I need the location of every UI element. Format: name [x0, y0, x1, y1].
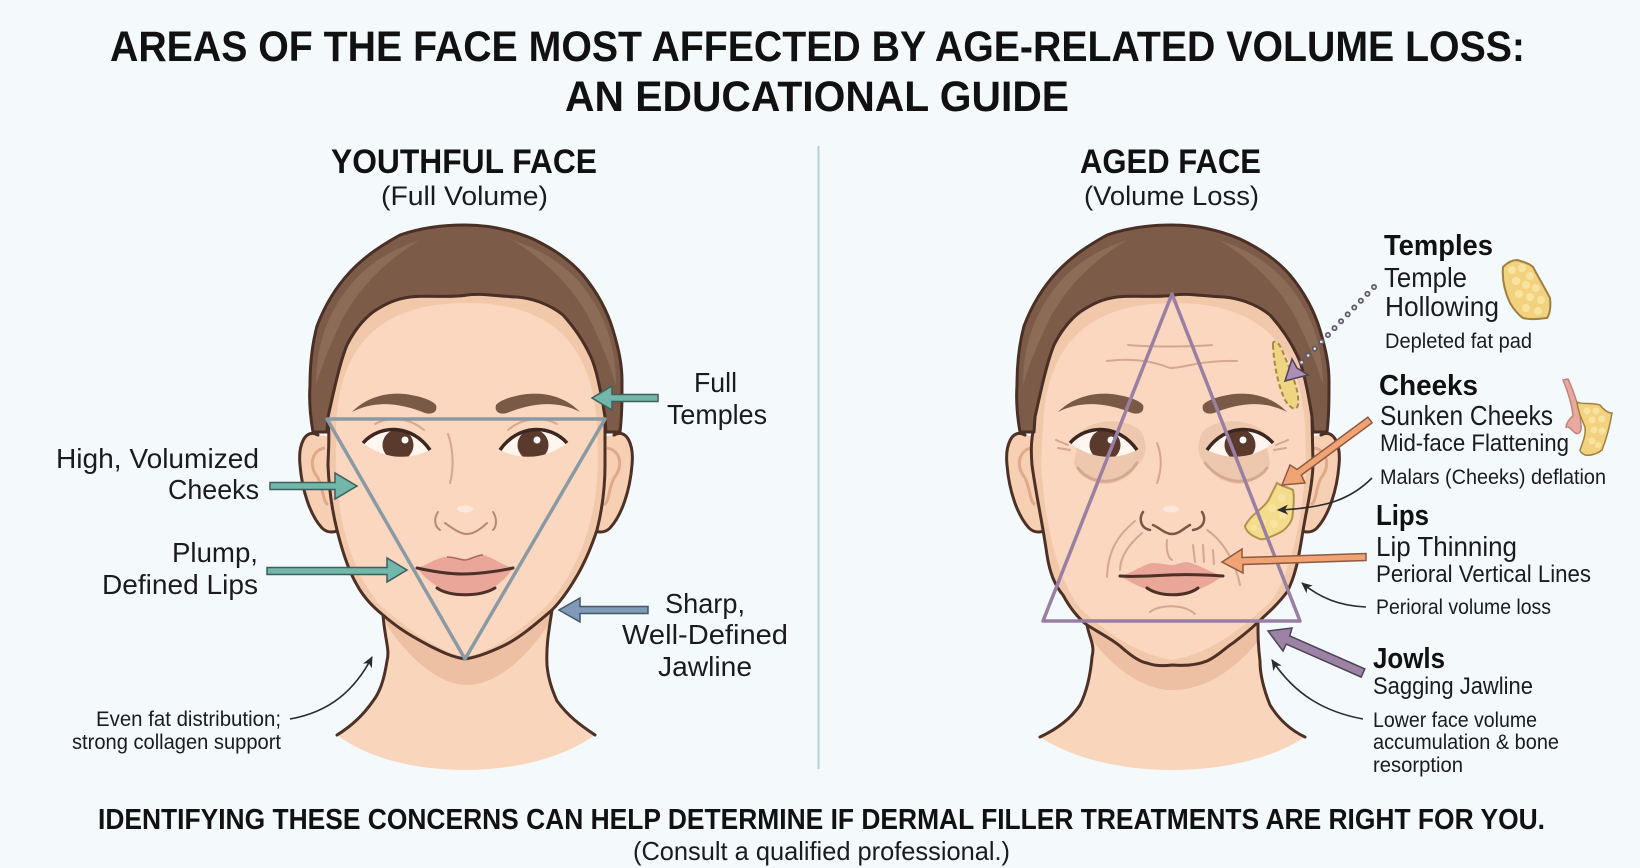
depleted temple fat pad: [1273, 342, 1298, 409]
eye socket shading: [1074, 421, 1270, 484]
label group: jowls: [1373, 643, 1559, 777]
note: even fat distribution: strong collagen support: [72, 731, 281, 754]
illustration: youthful face: [300, 225, 632, 770]
neck: [1040, 615, 1305, 770]
neck: [337, 600, 595, 770]
triangle overlay: [327, 419, 605, 659]
icon: cheek fat pad: [1563, 379, 1612, 455]
arrow: fat distribution curve: [290, 657, 372, 719]
label: high volumized cheeks: [56, 443, 259, 505]
heading: aged face: [1080, 143, 1261, 211]
label group: lips: Lip Thinning: [1376, 531, 1517, 562]
footer message: (Consult a qualified professional.): [633, 836, 1010, 866]
arrow: malars: [1278, 478, 1372, 510]
wrinkles around mouth: [1107, 521, 1240, 614]
label group: temples: Hollowing: [1385, 291, 1499, 322]
label: full temples: Temples: [667, 399, 767, 430]
label: full temples: [667, 367, 767, 430]
arrow: perioral: [1302, 583, 1366, 607]
footer message: [98, 804, 1545, 866]
label: plump defined lips: Plump,: [172, 537, 258, 568]
face skin: [328, 294, 605, 659]
label group: cheeks: Cheeks: [1379, 370, 1478, 402]
arrow: jawline: [559, 598, 648, 622]
heading: youthful face: [331, 143, 597, 211]
label group: cheeks: Mid-face Flattening: [1380, 430, 1569, 457]
label group: jowls: resorption: [1373, 754, 1463, 777]
arrow: temples dotted: [1285, 287, 1374, 381]
label: sharp jawline: Sharp,: [665, 588, 745, 619]
ears: [1007, 433, 1339, 532]
label: sharp jawline: Well-Defined: [622, 619, 788, 650]
label group: lips: [1376, 500, 1591, 619]
hair: [1017, 225, 1329, 432]
triangle overlay: [1043, 294, 1300, 621]
label group: cheeks: [1379, 370, 1606, 489]
eyes: [362, 420, 568, 457]
cheek fat pad: [1245, 483, 1294, 539]
arrow: full temples: [592, 386, 658, 410]
ears: [300, 433, 632, 532]
label: full temples: Full: [694, 367, 737, 398]
eyes: [1056, 430, 1288, 481]
face skin: [1031, 294, 1313, 666]
arrow: lips orange: [1222, 549, 1366, 573]
label: high volumized cheeks: Cheeks: [168, 474, 259, 505]
label group: jowls: Sagging Jawline: [1373, 673, 1533, 700]
note: even fat distribution: Even fat distribution;: [96, 708, 281, 731]
arrow: jowls: [1268, 628, 1365, 677]
label: high volumized cheeks: High, Volumized: [56, 443, 259, 474]
label: plump defined lips: Defined Lips: [102, 569, 258, 600]
arrow: lips: [267, 558, 407, 582]
label: sharp jawline: Jawline: [658, 651, 752, 682]
label group: jowls: Lower face volume: [1373, 709, 1537, 732]
illustration: aged face: [1007, 225, 1339, 770]
icon: temple fat pad: [1503, 260, 1550, 319]
heading: youthful face: YOUTHFUL FACE: [331, 143, 597, 181]
eyebrows: [352, 394, 580, 414]
label group: jowls: accumulation & bone: [1373, 731, 1559, 754]
label: plump defined lips: [102, 537, 258, 600]
heading: aged face: AGED FACE: [1080, 143, 1261, 181]
lips: [1120, 562, 1223, 595]
arrow: cheeks: [270, 473, 357, 499]
title: [110, 23, 1525, 121]
label group: temples: Depleted fat pad: [1385, 330, 1532, 353]
hair: [310, 225, 622, 432]
label group: lips: Perioral volume loss: [1376, 596, 1551, 619]
arrow: cheeks orange: [1282, 417, 1372, 485]
nose: [435, 434, 496, 534]
label group: lips: Lips: [1376, 500, 1429, 532]
label group: temples: [1384, 230, 1532, 353]
lips: [417, 555, 513, 595]
title: AREAS OF THE FACE MOST AFFECTED BY AGE-RELATED VOLUME LOSS:: [110, 23, 1525, 71]
label: sharp jawline: [622, 588, 788, 682]
label group: cheeks: Sunken Cheeks: [1380, 400, 1553, 431]
heading: youthful face: (Full Volume): [381, 181, 548, 211]
title: AN EDUCATIONAL GUIDE: [565, 73, 1069, 121]
eyebrows: [1058, 394, 1287, 414]
label group: cheeks: Malars (Cheeks) deflation: [1380, 466, 1606, 489]
label group: temples: Temples: [1384, 230, 1493, 262]
label group: lips: Perioral Vertical Lines: [1376, 561, 1591, 588]
note: even fat distribution: [72, 708, 281, 754]
label group: jowls: Jowls: [1373, 643, 1445, 675]
forehead wrinkles: [1107, 345, 1237, 368]
nose: [1141, 443, 1204, 534]
label group: temples: Temple: [1384, 262, 1467, 293]
arrow: lower face: [1272, 660, 1363, 719]
heading: aged face: (Volume Loss): [1084, 181, 1259, 211]
